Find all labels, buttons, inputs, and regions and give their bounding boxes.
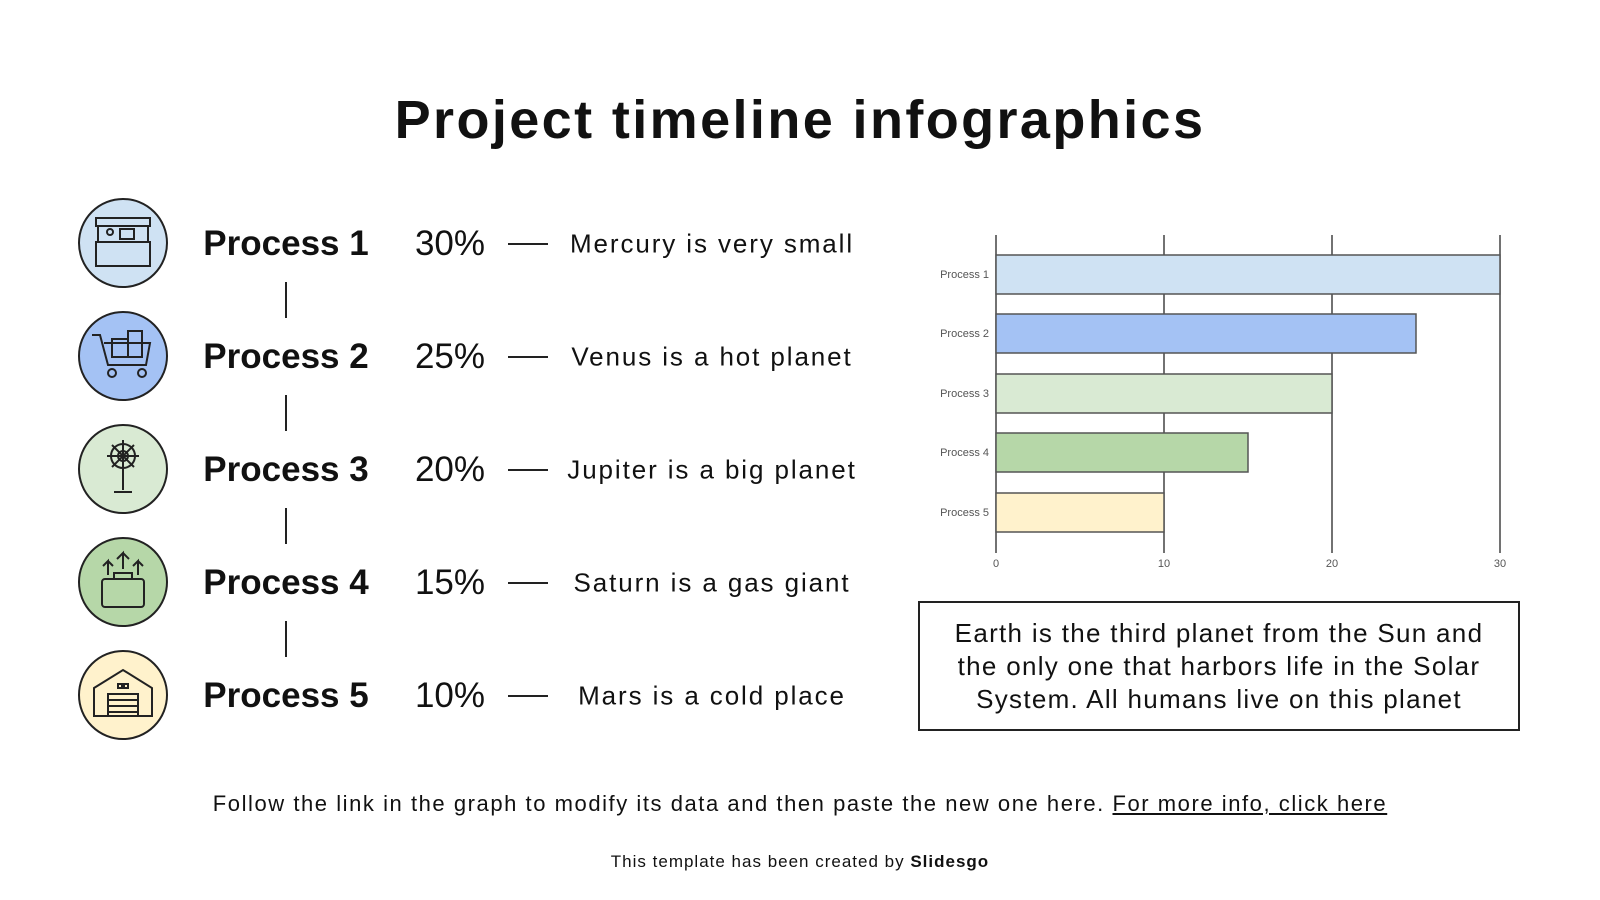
bar chart: Process 3 [940,388,989,400]
row 1: Process 1 [203,224,369,263]
text: 10% [415,676,485,715]
text: Mercury is very small [570,228,854,258]
bar chart: Process 4 [940,447,989,459]
text box: System. All humans live on this planet [976,684,1462,714]
bar chart: Process 5 [940,507,989,519]
panel: process list [78,198,168,740]
bar chart: 10 [1158,558,1170,570]
text: 25% [415,337,485,376]
text box: the only one that harbors life in the Solar [958,650,1480,680]
icon: ship wheel [78,424,168,514]
bar chart: 0 [993,558,999,570]
row 5: Process 5 [203,676,369,715]
icon: warehouse [78,650,168,740]
text: 20% [415,450,485,489]
icon: market stall [78,198,168,288]
footer note: Follow the link in the graph to modify its data and then paste the new one here. For more info, click here [213,791,1387,816]
text: 15% [415,563,485,602]
text box: Earth is the third planet from the Sun and [955,618,1483,648]
row 2: Process 2 [203,337,369,376]
title: Project timeline infographics [395,90,1205,150]
text: Venus is a hot planet [571,342,853,372]
bar chart: 20 [1326,558,1338,570]
bar chart: Process 2 [940,328,989,340]
text: 30% [415,224,485,263]
credit: This template has been created by Slidesgo [611,852,989,871]
text: Mars is a cold place [578,680,846,710]
bar chart [940,235,1506,570]
icon: shopping cart [78,311,168,401]
text box [918,601,1520,731]
bar chart: 30 [1494,558,1506,570]
bar chart: Process 1 [940,269,989,281]
text: Saturn is a gas giant [574,568,850,598]
row 4: Process 4 [203,563,369,602]
row 3: Process 3 [203,450,369,489]
icon: briefcase with arrows [78,537,168,627]
text: Jupiter is a big planet [567,454,857,484]
